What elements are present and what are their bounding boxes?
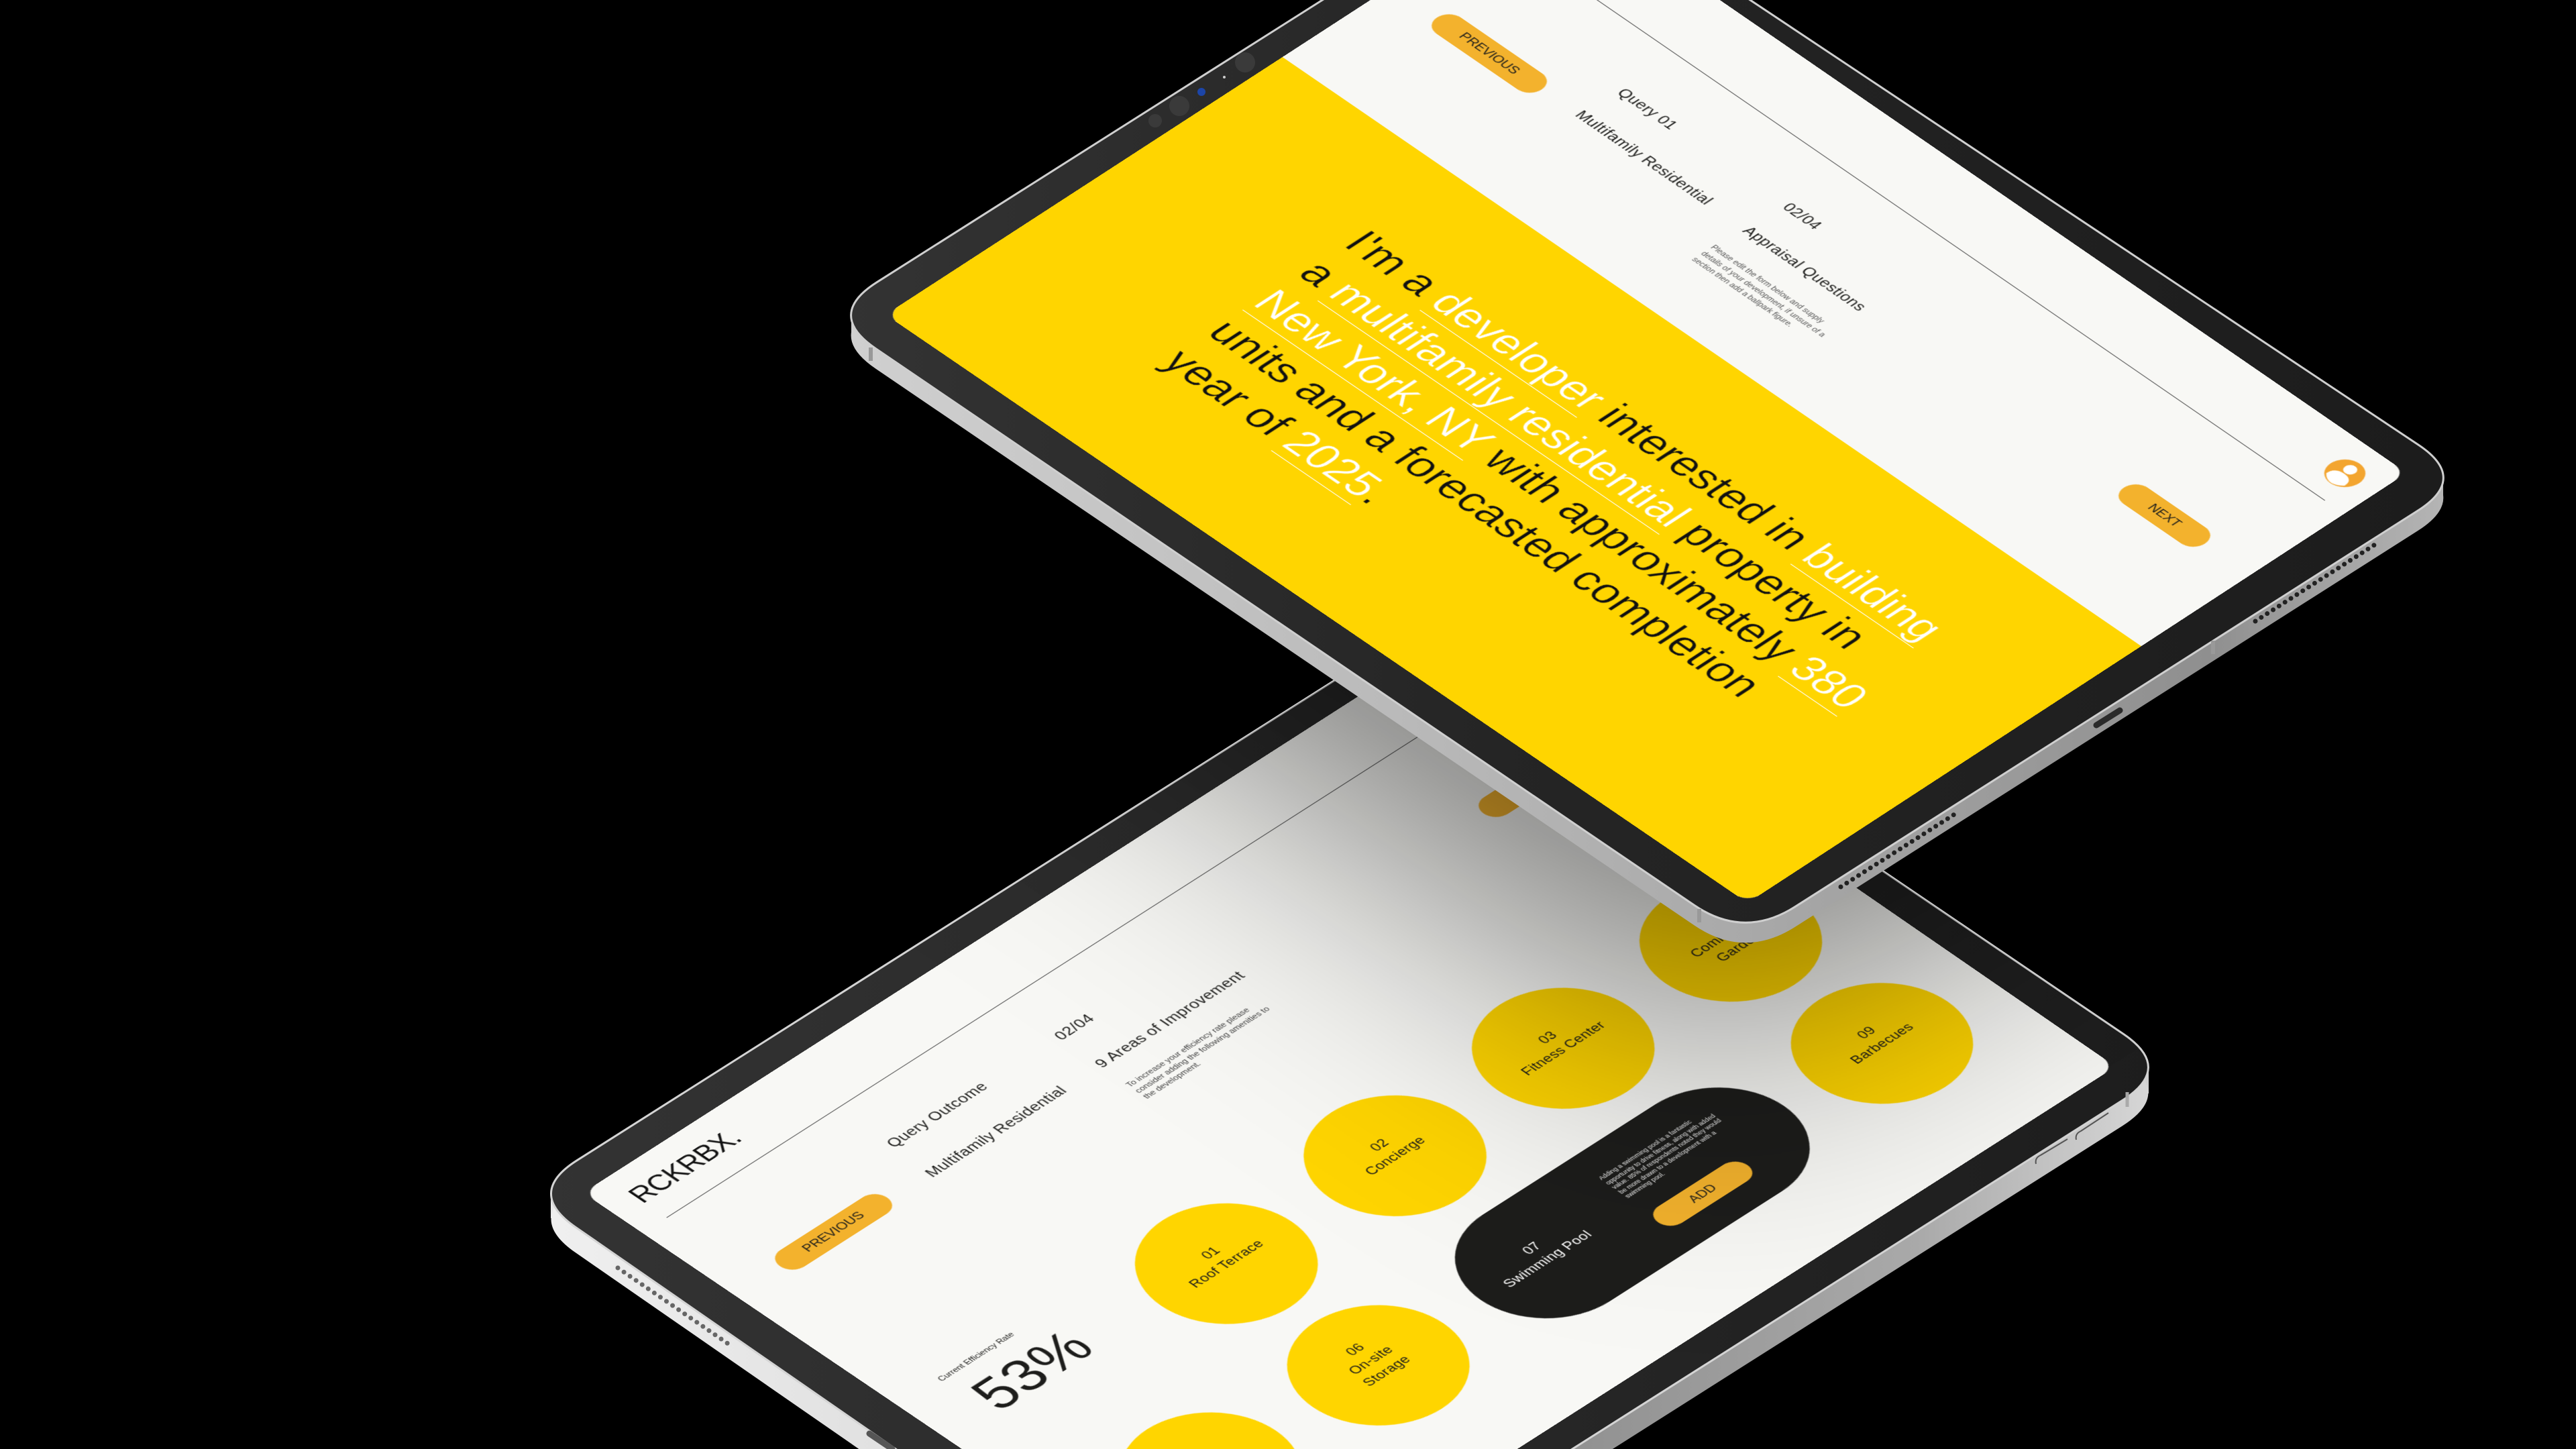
pool description: swimming pool. — [1623, 1171, 1667, 1199]
statement text: year of 2025. — [1152, 342, 1402, 511]
panel: swimming pool selected — [1417, 1063, 1847, 1343]
amenity: on-site storage: Storage — [1359, 1353, 1413, 1389]
amenity: concierge: 02 — [1366, 1136, 1393, 1154]
pool description: Adding a swimming pool is a fantastic — [1597, 1119, 1693, 1181]
amenity: community garden: 04 — [1695, 916, 1720, 934]
amenity: lower-left circle — [1081, 1387, 1340, 1449]
amenity: fitness center: 03 — [1535, 1029, 1560, 1046]
upper tablet screen: appraisal questions — [885, 0, 2407, 903]
pool description: value. 85% of respondents noted they would — [1610, 1118, 1723, 1190]
instructions paragraph: section then add a ballpark figure. — [1689, 256, 1794, 328]
amenity: on-site storage — [1249, 1280, 1507, 1449]
amenity: roof terrace — [1097, 1179, 1356, 1349]
efficiency label: Current Efficiency Rate — [936, 1331, 1017, 1383]
amenity: on-site storage: On-site — [1345, 1343, 1396, 1377]
button: previous: PREVIOUS — [799, 1210, 868, 1254]
amenity: community garden: Community — [1686, 912, 1760, 959]
button: previous — [768, 1189, 899, 1275]
panel: yellow statement — [885, 57, 2141, 903]
header: property type: Multifamily Residential — [922, 1084, 1071, 1180]
button: previous: PREVIOUS — [1456, 30, 1523, 76]
amenity: on-site storage: 06 — [1342, 1341, 1368, 1358]
logo: RCKRBX. — [622, 1126, 748, 1208]
instructions paragraph: details of your development, if unsure of a — [1699, 250, 1827, 338]
button: next — [2112, 480, 2217, 551]
intro paragraph: the development. — [1141, 1061, 1203, 1100]
button: add — [1646, 1157, 1760, 1230]
header: step counter: 02/04 — [1051, 1012, 1099, 1043]
amenity: roof terrace: Roof Terrace — [1185, 1237, 1267, 1290]
amenity: fitness center: Fitness Center — [1517, 1019, 1609, 1078]
button: add: ADD — [1685, 1182, 1720, 1205]
efficiency value: 53% — [957, 1321, 1108, 1419]
statement text: New York, NY with approximately 380 — [1243, 283, 1878, 716]
header: appraisal questions: Appraisal Questions — [1739, 224, 1870, 314]
amenity: roof terrace: 01 — [1197, 1244, 1224, 1262]
lower tablet screen: amenities outcome — [583, 623, 2116, 1449]
pool label: Swimming Pool — [1500, 1228, 1595, 1290]
statement text — [1152, 224, 1954, 716]
amenity: fitness center — [1434, 963, 1693, 1134]
amenity: community garden — [1602, 855, 1860, 1026]
pool description: opportunity to drive fitness, along with added — [1603, 1113, 1717, 1185]
header: property type: Multifamily Residential — [1571, 108, 1717, 207]
icon: user avatar — [2324, 459, 2367, 488]
header: areas of improvement: 9 Areas of Improvement — [1091, 969, 1249, 1071]
amenity: concierge — [1266, 1071, 1524, 1241]
pool description: be more drawn to a development with a — [1617, 1130, 1718, 1195]
instructions paragraph: Please edit the form below and supply — [1708, 244, 1826, 325]
amenity: barbecues: 09 — [1854, 1024, 1879, 1041]
header: query number: Query 01 — [1613, 86, 1681, 132]
intro paragraph: To increase your efficiency rate please — [1124, 1006, 1252, 1089]
pool label: 07 — [1519, 1240, 1545, 1256]
header: query outcome: Query Outcome — [883, 1080, 992, 1150]
statement text: a multifamily residential property in — [1289, 254, 1878, 656]
header: step counter: 02/04 — [1778, 201, 1825, 232]
statement text: I'm a developer interested in building — [1334, 224, 1954, 648]
button: next — [1472, 749, 1583, 822]
amenity: barbecues: Barbecues — [1847, 1021, 1917, 1066]
amenity: community garden: Garden — [1713, 929, 1765, 964]
button: previous — [1425, 9, 1554, 97]
amenity: concierge: Concierge — [1361, 1134, 1429, 1178]
statement text: units and a forecasted completion — [1197, 313, 1772, 704]
button: next: NEXT — [1507, 771, 1548, 799]
button: next: NEXT — [2145, 502, 2185, 529]
amenity: barbecues — [1753, 958, 2010, 1129]
cast shadow from upper tablet — [1052, 680, 2133, 1214]
intro paragraph: consider adding the following amenities to — [1133, 1006, 1272, 1095]
